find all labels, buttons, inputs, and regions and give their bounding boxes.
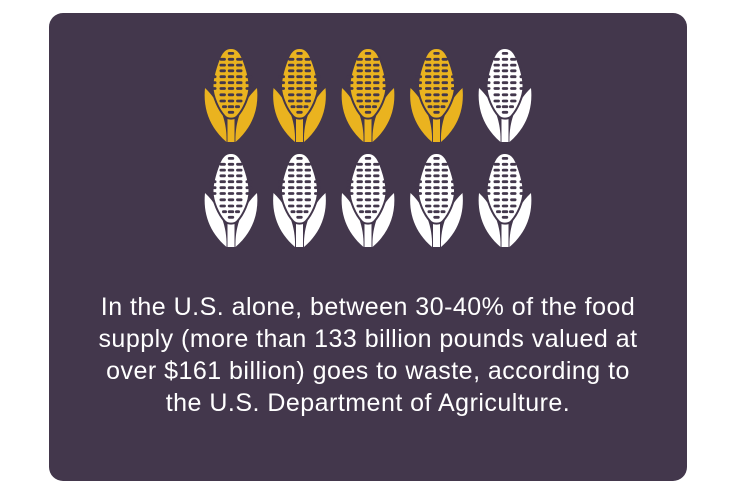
corn 1 (gold) [205, 48, 257, 142]
corn 8 (white) [342, 153, 394, 247]
text block: food waste statistic [98, 293, 638, 417]
corn 5 (white) [479, 48, 531, 142]
corn 6 (white) [205, 153, 257, 247]
text block: food waste statistic: over $161 billion) goes to waste, according to [106, 357, 630, 385]
corn 4 (gold) [410, 48, 463, 142]
corn 7 (white) [273, 153, 326, 247]
corn 3 (gold) [342, 48, 394, 142]
corn 2 (gold) [273, 48, 326, 142]
corn 9 (white) [410, 153, 463, 247]
text block: food waste statistic: the U.S. Department of Agriculture. [166, 389, 570, 417]
text block: food waste statistic: supply (more than 133 billion pounds valued at [98, 325, 638, 353]
text block: food waste statistic: In the U.S. alone, between 30-40% of the food [101, 293, 635, 321]
corn 10 (white) [479, 153, 531, 247]
